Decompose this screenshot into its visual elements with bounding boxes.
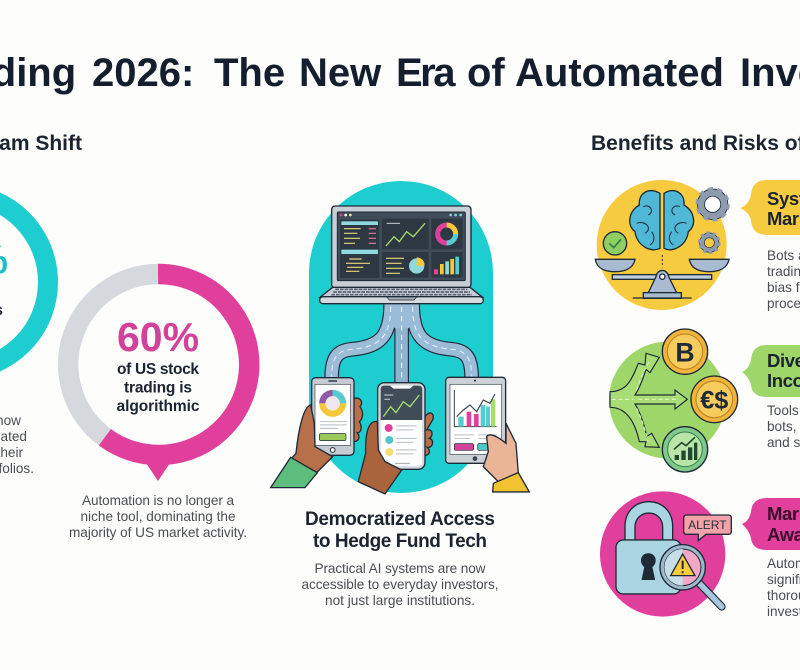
text block: market awareness description [767, 556, 800, 619]
gears [697, 189, 728, 253]
title: Automated [515, 51, 724, 95]
text block: pink stat description [69, 493, 247, 540]
padlock [616, 502, 681, 594]
callout: diverse income [742, 345, 800, 397]
arrows [610, 353, 687, 447]
text block: democratized access description [302, 561, 498, 608]
panel: pink 60% donut [68, 274, 249, 481]
heading: democratized access: to Hedge Fund Tech [313, 531, 487, 552]
title: The [214, 51, 285, 95]
scale [595, 255, 729, 298]
icon: laptop [320, 206, 483, 304]
euro dollar coin [691, 376, 738, 423]
panel: teal stat ring [0, 194, 48, 370]
icon: left phone in hand [271, 378, 363, 488]
text block: teal stat description [0, 413, 34, 476]
alert tag: ALERT [688, 518, 727, 532]
text block: pink stat description: Automation is no longer a [82, 493, 234, 508]
brain [630, 191, 694, 250]
text block: democratized access description: Practical AI systems are now [314, 561, 486, 576]
title: New [299, 51, 382, 95]
callout: systematic management [740, 180, 800, 235]
icon: brain and scale on yellow circle [595, 180, 729, 310]
title: 2026: [92, 51, 194, 95]
teal stadium backdrop [309, 181, 493, 493]
stat label: trading is [124, 380, 192, 396]
title: Era [396, 51, 456, 95]
text block: democratized access description: accessible to everyday investors, [302, 577, 498, 592]
text block: democratized access description: not just large institutions. [325, 593, 475, 608]
euro dollar coin: €$ [700, 386, 728, 414]
panel: democratized access illustration [271, 181, 529, 494]
callout: market awareness [742, 498, 800, 550]
check badge [603, 232, 627, 255]
icon: middle phone in hand [358, 383, 433, 494]
stat: 60%: 60% [117, 314, 199, 360]
heading: democratized access [305, 509, 495, 552]
stat label: of US stock [117, 361, 199, 378]
stat label: algorithmic [116, 398, 200, 415]
text block: systematic description [767, 248, 800, 311]
text block: diverse description [767, 403, 800, 450]
text block: pink stat description: majority of US market activity. [69, 525, 247, 540]
text block: pink stat description: niche tool, dominating the [80, 509, 236, 524]
icon: diversified arrows and coins on green circle [609, 329, 738, 472]
bitcoin coin: B [675, 337, 695, 367]
bitcoin coin [662, 329, 708, 374]
magnifier [660, 545, 722, 607]
icon: network roads [332, 303, 472, 383]
icon: tablet in hand [446, 377, 529, 492]
stat label [116, 361, 200, 415]
growth coin [662, 427, 708, 472]
heading: democratized access: Democratized Access [305, 509, 495, 530]
icon: lock and alert on pink circle [600, 491, 731, 617]
title: of [467, 51, 505, 95]
